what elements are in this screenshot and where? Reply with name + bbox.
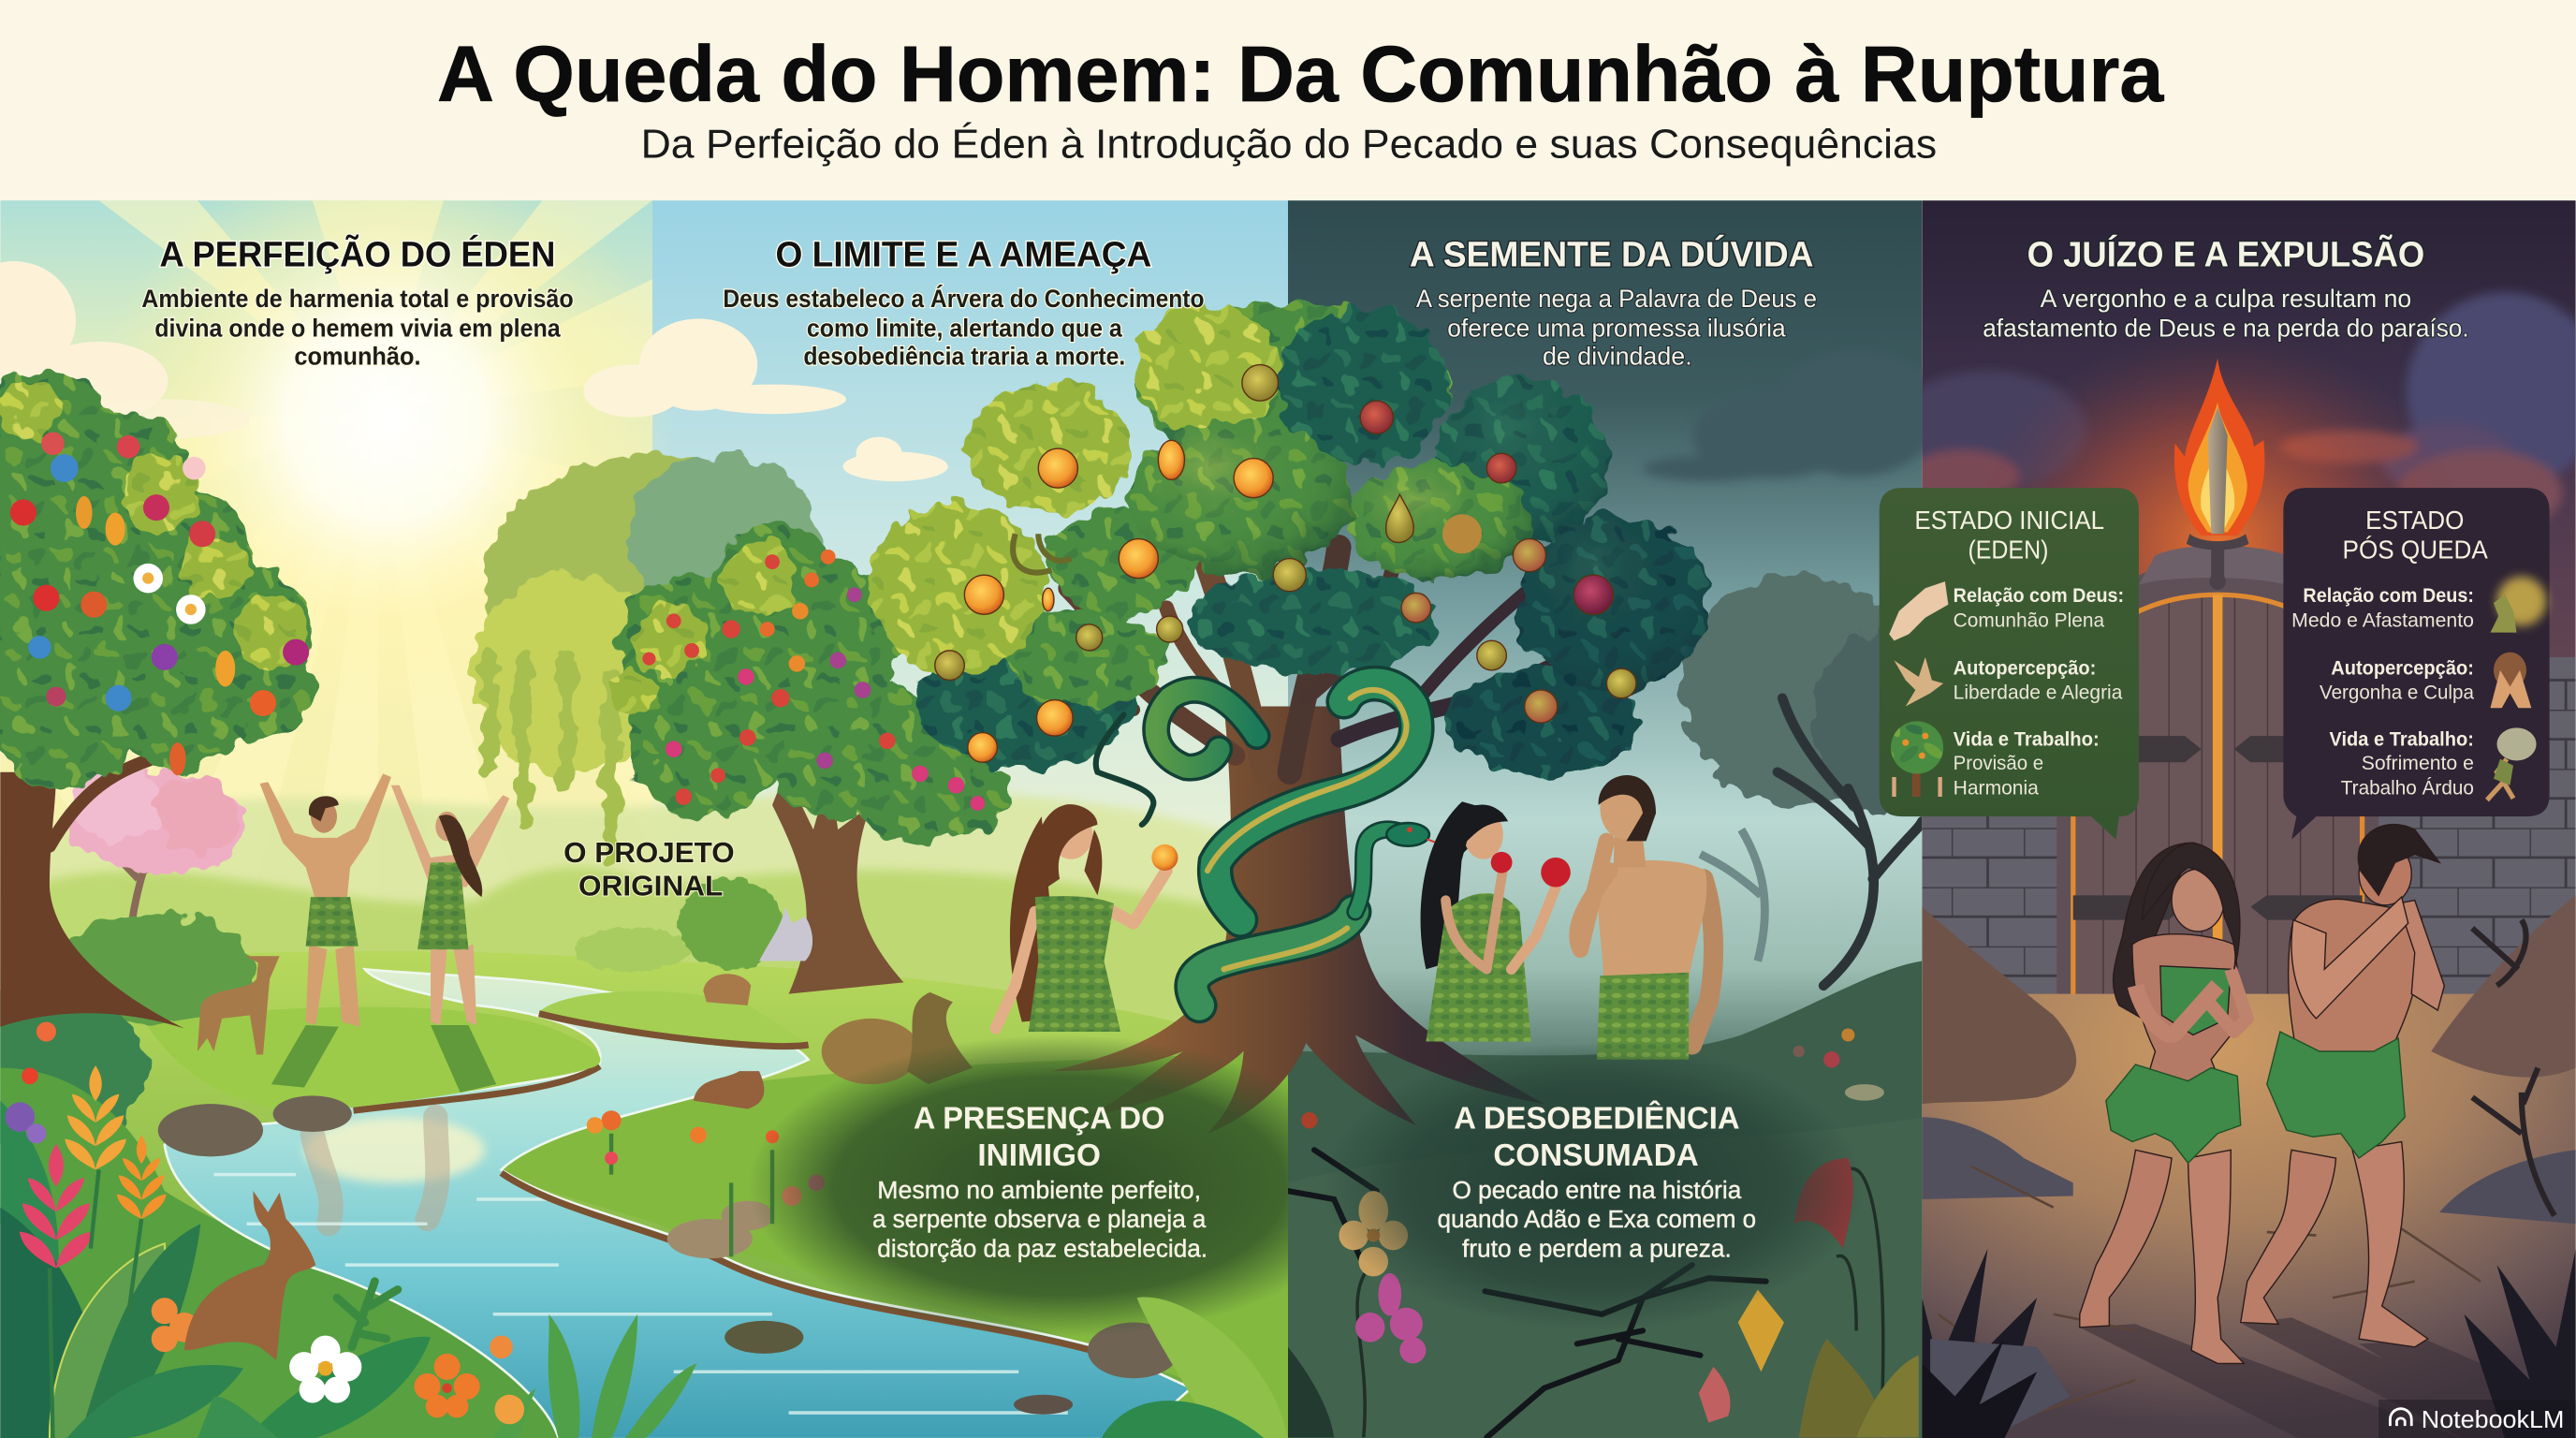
panel: Eden background sky, sun and hills	[0, 131, 1288, 1084]
panel: Estado Inicial (Eden): Harmonia	[1954, 777, 2039, 799]
golden fruit	[1151, 844, 1178, 871]
misty tree on the right	[1680, 575, 1950, 986]
panel: Estado Pos Queda: Vida e Trabalho:	[2329, 729, 2474, 751]
panel: Eden ground and river	[0, 914, 1288, 1438]
serpent coiled around the trunk	[1096, 683, 1445, 1005]
caption: A Desobediência Consumada: CONSUMADA	[1493, 1138, 1699, 1173]
tree: background willow	[472, 455, 818, 854]
sword with flames	[2174, 359, 2264, 590]
gate arch	[2056, 546, 2378, 1002]
figure: man contemplating	[1577, 775, 1714, 1060]
shrubs on the left	[0, 914, 255, 1150]
tree: left Eden tree	[0, 372, 313, 1028]
caption: A Presença do Inimigo: distorção da paz estabelecida.	[877, 1234, 1208, 1262]
gate glowing seam	[2213, 594, 2222, 947]
watermark: NotebookLM: NotebookLM	[2422, 1405, 2564, 1433]
rocks	[158, 1095, 1179, 1415]
text block: doubt description: oferece uma promessa ilusória	[1447, 315, 1786, 343]
canopy clusters	[868, 302, 1708, 775]
flower: white	[289, 1336, 361, 1403]
icon: face covered by hands	[2490, 653, 2531, 708]
panel: Estado Pos Queda: Vergonha e Culpa	[2320, 682, 2474, 704]
panel: Estado Inicial (Eden): Relação com Deus:	[1954, 585, 2124, 607]
panel: Estado Pos Queda: Autopercepção:	[2331, 657, 2474, 679]
text block: Eden description: comunhão.	[294, 343, 421, 371]
label: O Projeto Original	[564, 836, 735, 902]
heading: O Juízo e a Expulsão: O JUÍZO E A EXPULSÃO	[2027, 234, 2424, 273]
icon: dove	[1894, 657, 1943, 707]
grip	[2211, 547, 2224, 580]
panel: judgement background	[1889, 200, 2576, 1438]
panel: Estado Inicial (Eden): (EDEN)	[1968, 536, 2048, 565]
cloud: centre	[583, 318, 948, 481]
river reflections	[213, 1117, 1068, 1413]
figure: ashamed man	[2241, 825, 2444, 1347]
text block: doubt description: de divindade.	[1543, 343, 1692, 371]
panel: Estado Inicial (Eden): Autopercepção:	[1954, 657, 2096, 679]
figure: woman holding fruit	[996, 804, 1178, 1032]
guard	[2187, 534, 2249, 550]
title: A Queda do Homem: Da Comunhão à Ruptura	[437, 30, 2164, 118]
cloud: upper left	[0, 261, 250, 439]
text block: judgement description	[1983, 285, 2469, 343]
deer: foreground	[184, 1191, 315, 1360]
fruits on middle tree	[642, 550, 985, 811]
caption: A Presença do Inimigo: Mesmo no ambiente perfeito,	[877, 1176, 1201, 1204]
text block: Eden description: Ambiente de harmenia total e provisão	[141, 285, 574, 313]
text block: doubt description: A serpente nega a Palavra de Deus e	[1416, 285, 1817, 313]
panel: Estado Pos Queda: PÓS QUEDA	[2343, 536, 2489, 565]
lower coil	[1193, 912, 1354, 1005]
gate hinges	[2073, 736, 2363, 920]
left river bank	[0, 1068, 567, 1438]
top cluster	[1135, 302, 1451, 466]
far left light cluster	[868, 501, 1045, 672]
text block: Eden description	[141, 285, 574, 371]
panel: Estado Pos Queda	[2283, 488, 2550, 840]
figure: man with arms raised	[260, 773, 391, 1027]
sun	[154, 200, 610, 588]
distant hills	[50, 790, 1222, 912]
panel: doubt background	[1288, 200, 1950, 1438]
plants: dead flowers and cracks in the fallen ground	[1288, 1028, 1919, 1437]
dead branches	[2472, 920, 2554, 1215]
sprig	[337, 1282, 398, 1347]
text block: limit description: como limite, alertando que a	[807, 315, 1122, 343]
caption: A Desobediência Consumada: A DESOBEDIÊNCIA	[1454, 1100, 1740, 1136]
thin tail	[1096, 714, 1153, 825]
sun rays	[56, 200, 665, 807]
plants: bottom left foreground	[0, 1021, 696, 1438]
caption: A Presença do Inimigo: a serpente observa e planeja a	[872, 1205, 1207, 1233]
heading: A Perfeição do Éden: A PERFEIÇÃO DO ÉDEN	[160, 234, 555, 273]
text block: doubt description	[1416, 285, 1817, 371]
icon: figure before light	[2490, 577, 2546, 633]
panel: Estado Pos Queda: Medo e Afastamento	[2291, 609, 2474, 631]
dark clouds	[1889, 292, 2576, 536]
caption: A Presença do Inimigo	[872, 1101, 1208, 1262]
fire glow	[1971, 329, 2464, 756]
upper small land	[539, 991, 788, 1043]
watermark: NotebookLM	[2378, 1400, 2576, 1438]
figure: woman eating the fruit	[1421, 801, 1571, 1041]
red apples	[1491, 852, 1513, 873]
rock heap right	[2431, 895, 2576, 1078]
right land	[493, 1051, 1288, 1438]
panel: Estado Inicial (Eden): ESTADO INICIAL	[1914, 506, 2104, 535]
dark halo behind the disobedience caption	[1323, 1041, 1865, 1330]
tree trunk and roots	[1051, 707, 1544, 1134]
fruits on central tree	[935, 365, 1636, 762]
left upper light cluster	[966, 381, 1131, 512]
tree branches	[974, 547, 1626, 772]
meadow peninsula	[148, 1006, 600, 1111]
icon: hand	[1889, 581, 1948, 640]
label: O Projeto Original: O PROJETO	[564, 836, 735, 869]
dark halo behind the enemy caption	[748, 1034, 1371, 1337]
bottom bright leaves	[1101, 1297, 1288, 1438]
dirt ground	[1922, 994, 2576, 1438]
right dark clusters	[1518, 514, 1708, 692]
caption: A Desobediência Consumada: quando Adão e Exa comem o	[1438, 1205, 1756, 1233]
figure: ashamed woman	[2080, 843, 2247, 1363]
flowers on the bank	[587, 1110, 825, 1256]
fruits on left tree	[10, 432, 309, 775]
text block: limit description: desobediência traria a morte.	[803, 343, 1125, 371]
main body	[1215, 683, 1416, 920]
long shadows	[2080, 1317, 2576, 1438]
right mid cluster	[1347, 463, 1531, 581]
heliconia flowers	[6, 1021, 167, 1438]
caption: A Presença do Inimigo: INIMIGO	[977, 1138, 1101, 1173]
tree: fruit tree in the middle	[609, 522, 1009, 994]
deer: near the couple	[198, 956, 280, 1055]
grey rock foreground	[1930, 1339, 2070, 1438]
grass base	[0, 951, 1288, 1438]
lower left cluster	[915, 631, 1135, 769]
storm cloud	[1643, 352, 1939, 481]
text block: judgement description: afastamento de Deus e na perda do paraíso.	[1983, 315, 2469, 343]
icon: tree	[1891, 721, 1943, 797]
panel: Estado Inicial (Eden): Provisão e	[1954, 753, 2043, 774]
icon: man carrying a sack	[2487, 727, 2537, 800]
figure shadows	[271, 1025, 496, 1093]
dark grassy slope	[1288, 961, 1922, 1438]
text block: limit description	[723, 285, 1205, 371]
text block: Eden description: divina onde o hemem vivia em plena	[154, 315, 561, 343]
panel: Estado Pos Queda: Relação com Deus:	[2303, 585, 2474, 607]
label: O Projeto Original: ORIGINAL	[578, 869, 723, 902]
panel: Estado Inicial (Eden)	[1880, 488, 2139, 840]
panel: Estado Inicial (Eden): Comunhão Plena	[1954, 609, 2104, 631]
small hidden serpent in the canopy	[1013, 534, 1071, 573]
caption: A Desobediência Consumada	[1438, 1100, 1756, 1262]
small background animals and shrubs	[575, 877, 973, 1108]
caption: A Presença do Inimigo: A PRESENÇA DO	[914, 1101, 1164, 1136]
stone wall	[1922, 657, 2576, 1002]
dark foreground plants	[1922, 1249, 2576, 1438]
header band	[0, 0, 2576, 200]
river bank	[354, 1014, 1109, 1356]
tree: pink blossom	[69, 769, 247, 923]
flower: orange	[414, 1354, 480, 1417]
blade	[2208, 407, 2228, 534]
panel: Estado Inicial (Eden): Vida e Trabalho:	[1954, 729, 2100, 751]
subtitle: Da Perfeição do Éden à Introdução do Pecado e suas Consequências	[641, 122, 1937, 167]
caption: A Desobediência Consumada: O pecado entre na história	[1452, 1176, 1742, 1204]
figure: woman with arms raised	[391, 785, 509, 1025]
panel: Estado Pos Queda: ESTADO	[2365, 506, 2464, 535]
text block: judgement description: A vergonho e a culpa resultam no	[2041, 285, 2411, 313]
caption: A Desobediência Consumada: fruto e perdem a pureza.	[1462, 1234, 1732, 1262]
river	[165, 969, 1191, 1438]
rock heap left	[1922, 907, 2076, 1104]
panel: Estado Pos Queda: Trabalho Árduo	[2341, 777, 2474, 799]
flame	[2174, 359, 2264, 536]
ground cracks	[1939, 1167, 2481, 1413]
left loop	[1156, 690, 1257, 768]
heading: A Semente da Dúvida: A SEMENTE DA DÚVIDA	[1410, 234, 1814, 273]
panel: Estado Pos Queda: Sofrimento e	[2362, 753, 2474, 774]
mid clusters	[1129, 420, 1352, 575]
heading: O Limite e a Ameaça: O LIMITE E A AMEAÇA	[776, 234, 1151, 273]
tree: central Tree of Knowledge	[868, 302, 1708, 1134]
neck and head	[1355, 829, 1410, 912]
panel: Estado Inicial (Eden): Liberdade e Alegria	[1954, 682, 2123, 704]
text block: limit description: Deus estabeleco a Árvera do Conhecimento	[723, 285, 1205, 313]
